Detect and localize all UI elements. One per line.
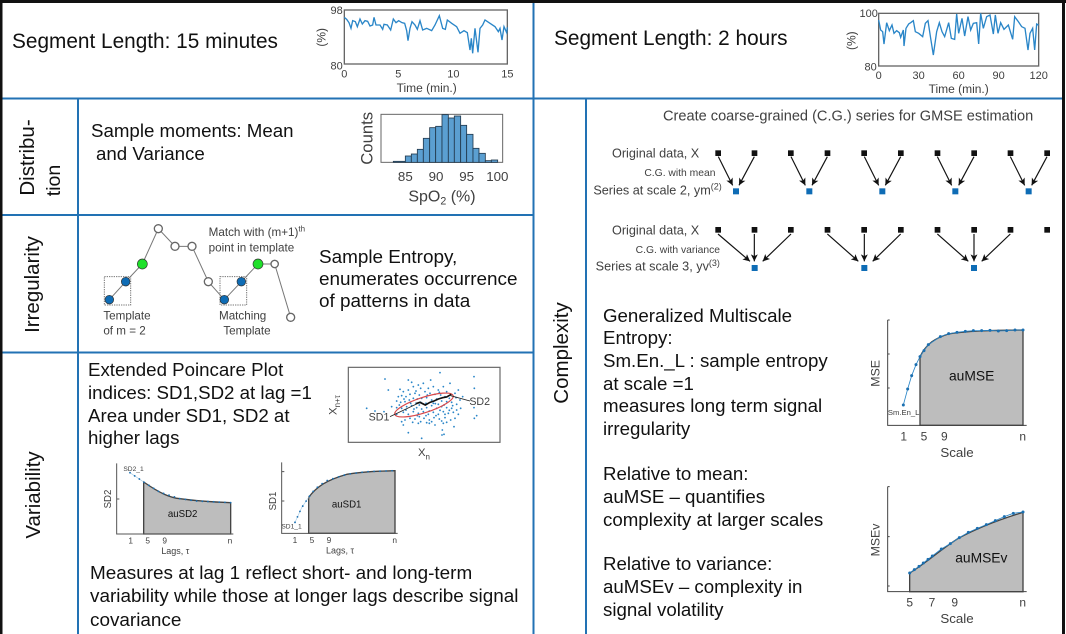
text: sample entropy: of patterns in data (319, 291, 471, 312)
chart: auSD2 area: auSD2 (168, 509, 197, 520)
text: relative to mean: Relative to mean: (603, 463, 748, 484)
chart: auSD2 area: n (228, 536, 233, 546)
chart: auSD2 area: 1 (128, 536, 133, 546)
chart: Poincare scatter plot: n (426, 452, 430, 461)
text: generalized multiscale entropy: at scale =1 (603, 373, 694, 394)
panel: complexity (550, 109, 1050, 626)
text: sample moments: and Variance (96, 143, 205, 164)
chart: SpO2 over 15 minutes: 98 (331, 5, 343, 17)
chart: SpO2 over 15 minutes: 5 (395, 68, 401, 80)
diagram: template matching (103, 224, 305, 338)
text: lag interpretation: variability while those at longer lags describe signal (90, 586, 518, 607)
text: lag interpretation (90, 563, 518, 631)
chart: auMSEv area: auMSEv (955, 550, 1008, 566)
text: generalized multiscale entropy: irregularity (603, 418, 691, 439)
chart: auMSEv area: 9 (951, 596, 958, 610)
chart: Poincare scatter plot: X (328, 407, 340, 415)
row label continuation: tion (43, 165, 65, 196)
text: generalized multiscale entropy: Sm.En._L : sample entropy (603, 350, 828, 372)
text: sample moments: Sample moments: Mean (91, 120, 294, 141)
row label: variability: Variability (22, 451, 45, 539)
panel: distribution (16, 112, 508, 208)
panel: 2 hour segment (554, 8, 1048, 96)
chart: auMSE area: 5 (921, 430, 928, 444)
diagram: template matching: Match with (m+1) (209, 226, 298, 239)
chart: SpO2 over 15 minutes: 10 (447, 68, 459, 80)
chart: auMSE area: auMSE (949, 368, 994, 384)
chart: auSD1 area (268, 462, 398, 555)
text: relative to mean: auMSE – quantifies (603, 486, 765, 507)
chart: SpO2 histogram: SpO (408, 188, 440, 205)
chart: auMSE area: 9 (941, 430, 948, 444)
chart: SpO2 over 15 minutes: Time (min.) (397, 81, 457, 95)
chart: auSD1 area: SD1_1 (281, 524, 302, 531)
diagram: coarse-grained series: C.G. with mean (644, 168, 716, 179)
diagram: template matching: of m = 2 (103, 325, 146, 338)
text: relative to variance (603, 553, 802, 620)
chart: SpO2 over 2 hours: (%) (844, 31, 858, 50)
chart: Poincare scatter plot: n+τ (333, 394, 342, 407)
text: generalized multiscale entropy: Entropy: (603, 327, 673, 348)
chart: SpO2 over 2 hours: 0 (876, 70, 882, 82)
chart: SpO2 histogram (357, 112, 508, 208)
row label: complexity: Complexity (550, 302, 573, 404)
text: generalized multiscale entropy (603, 305, 828, 439)
heading: segment length 15 minutes: Segment Length: 15 minutes (12, 30, 278, 53)
chart: SpO2 histogram: 85 (398, 169, 413, 184)
chart: auMSE area: Scale (940, 445, 974, 460)
chart: auSD1 area: Lags, τ (326, 545, 354, 555)
text: lag interpretation: Measures at lag 1 reflect short- and long-term (90, 563, 472, 584)
chart: auMSEv area: Scale (940, 611, 974, 626)
chart: auMSEv area: n (1019, 596, 1026, 610)
diagram: coarse-grained series (593, 109, 1050, 274)
chart: auMSEv area: MSEv (868, 523, 882, 556)
chart: auSD2 area: SD2_1 (123, 466, 144, 473)
diagram: template matching: point in template (209, 241, 294, 254)
text: sample entropy (319, 247, 517, 312)
diagram: coarse-grained series: C.G. with variance (636, 245, 720, 256)
chart: SpO2 over 2 hours: 60 (953, 70, 965, 82)
panel: 15 minute segment (12, 5, 513, 95)
diagram: template matching: th (298, 224, 305, 233)
diagram: coarse-grained series: Series at scale 3, yv (596, 260, 709, 274)
chart: SpO2 histogram: (%) (446, 188, 476, 205)
chart: auSD2 area (103, 463, 233, 556)
text: Poincare indices (88, 359, 312, 448)
text: Poincare indices: Area under SD1, SD2 at (88, 405, 290, 426)
text: generalized multiscale entropy: measures long term signal (603, 395, 822, 416)
chart: auSD1 area: 9 (327, 535, 332, 545)
chart: auSD2 area: Lags, τ (161, 546, 190, 556)
chart: SpO2 over 2 hours: 90 (993, 70, 1005, 82)
text: lag interpretation: covariance (90, 610, 181, 631)
chart: SpO2 histogram: 90 (429, 169, 443, 184)
diagram: coarse-grained series: Create coarse-grained (C.G.) series for GMSE estimation (663, 109, 1033, 125)
chart: auSD1 area: 5 (310, 535, 315, 545)
text: relative to mean (603, 463, 823, 530)
text: Poincare indices: indices: SD1,SD2 at lag =1 (88, 382, 312, 403)
chart: SpO2 histogram: 95 (459, 169, 474, 184)
chart: auMSE area: MSE (868, 360, 882, 387)
chart: auMSE area (868, 320, 1027, 460)
heading: segment length 2 hours: Segment Length: 2 hours (554, 27, 788, 50)
text: Poincare indices: higher lags (88, 427, 179, 448)
chart: auSD1 area: auSD1 (332, 499, 361, 510)
text: generalized multiscale entropy: Generalized Multiscale (603, 305, 792, 326)
chart: auMSEv area: 7 (929, 596, 936, 610)
diagram: coarse-grained series: Series at scale 2, ym (593, 183, 711, 197)
chart: auSD1 area: SD1 (268, 492, 279, 510)
row label: distribution: Distribu- (16, 119, 39, 196)
diagram: coarse-grained series: Original data, X (612, 146, 700, 160)
chart: SpO2 over 15 minutes (315, 5, 513, 95)
chart: auSD2 area: 5 (145, 536, 150, 546)
text: relative to variance: Relative to variance: (603, 553, 772, 574)
chart: SpO2 over 2 hours: Time (min.) (929, 82, 989, 96)
chart: SpO2 over 15 minutes: 80 (331, 60, 343, 72)
chart: Poincare scatter plot: X (418, 447, 426, 459)
chart: auSD1 area: 1 (293, 535, 298, 545)
diagram: coarse-grained series: (2) (711, 182, 722, 192)
diagram: template matching: Template (103, 309, 151, 322)
chart: auMSE area: Sm.En_L (888, 408, 919, 417)
diagram: template matching: Matching (219, 309, 266, 322)
chart: SpO2 histogram: 100 (486, 169, 508, 184)
chart: auMSE area: 1 (900, 430, 907, 444)
chart: SpO2 over 2 hours: 30 (913, 70, 925, 82)
text: sample entropy: enumerates occurrence (319, 269, 517, 290)
panel: irregularity (21, 224, 517, 338)
chart: auSD2 area: 9 (162, 536, 167, 546)
chart: SpO2 histogram: 2 (440, 196, 446, 208)
chart: auMSE area: n (1019, 430, 1026, 444)
diagram: coarse-grained series: (3) (709, 258, 720, 268)
chart: auSD1 area: n (392, 535, 397, 545)
chart: Poincare scatter plot: SD2 (469, 396, 490, 408)
chart: auSD2 area: SD2 (103, 490, 114, 508)
text: sample entropy: Sample Entropy, (319, 247, 457, 268)
text: relative to variance: auMSEv – complexity in (603, 576, 802, 597)
text: Poincare indices: Extended Poincare Plot (88, 359, 284, 380)
chart: SpO2 over 2 hours: 120 (1030, 70, 1048, 82)
text: sample moments (91, 120, 294, 164)
diagram: coarse-grained series: Original data, X (612, 223, 700, 237)
chart: SpO2 over 2 hours: 80 (865, 61, 877, 73)
chart: SpO2 over 2 hours: 100 (860, 8, 878, 20)
chart: SpO2 over 15 minutes: 0 (341, 68, 347, 80)
diagram: template matching: Template (223, 325, 271, 338)
chart: auMSEv area (868, 487, 1027, 626)
chart: SpO2 histogram: Counts (357, 112, 376, 165)
row label: irregularity: Irregularity (21, 235, 44, 333)
chart: auMSEv area: 5 (906, 596, 913, 610)
chart: SpO2 over 2 hours (844, 8, 1048, 96)
text: relative to variance: signal volatility (603, 599, 724, 620)
text: relative to mean: complexity at larger scales (603, 509, 823, 530)
chart: SpO2 over 15 minutes: 15 (501, 68, 513, 80)
chart: Poincare scatter plot: SD1 (369, 412, 389, 424)
panel: variability (22, 359, 518, 631)
chart: SpO2 over 15 minutes: (%) (315, 28, 329, 47)
chart: Poincare scatter plot (328, 367, 500, 461)
